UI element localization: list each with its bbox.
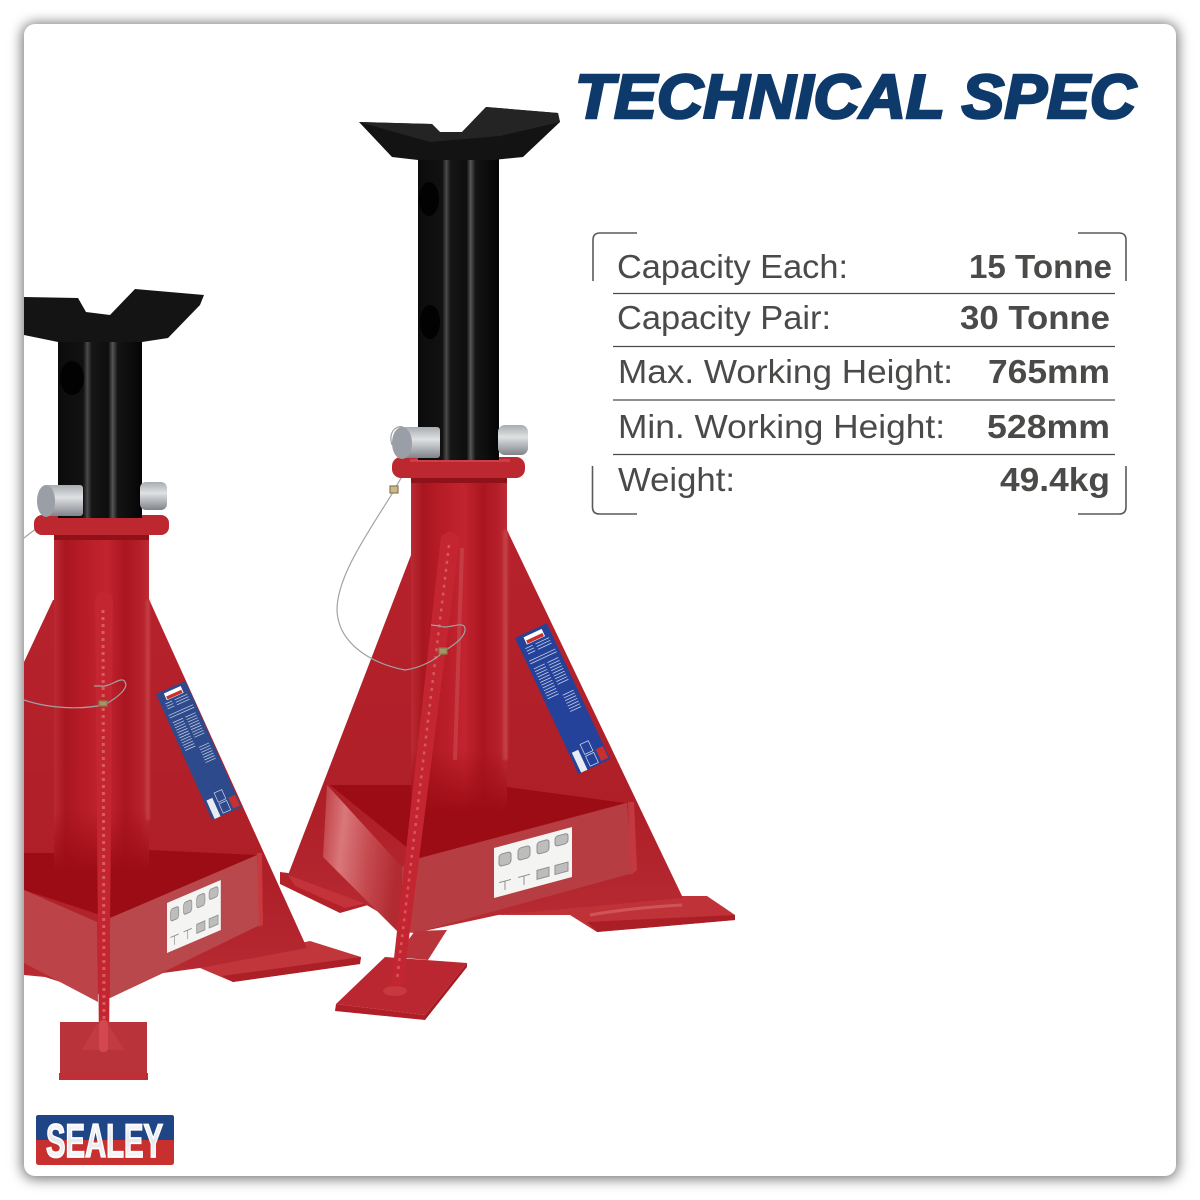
right stand: tray right panel [402, 803, 633, 933]
corner brackets [592, 233, 1126, 514]
right stand: rear-right foot [498, 896, 735, 932]
row: capacity pair: 30 Tonne [960, 299, 1110, 336]
right stand: triangular gusset [288, 530, 683, 933]
right stand: front foot plate [335, 957, 467, 1020]
row: weight: 49.4kg [1000, 461, 1110, 498]
row: max working height [618, 353, 1110, 390]
right stand: saddle [359, 107, 560, 160]
right stand: instruction sticker [494, 827, 572, 898]
right stand: locking pins [392, 425, 528, 459]
divider 2 [613, 346, 1115, 348]
row: max working height: 765mm [988, 353, 1110, 390]
divider 4 [613, 454, 1115, 456]
left stand: instruction sticker [167, 880, 221, 953]
right stand: prop rod [391, 531, 462, 985]
row: min working height: 528mm [987, 408, 1110, 445]
logo: Sealey: SEALEY [46, 1114, 163, 1167]
left stand: back-right foot [200, 941, 361, 982]
left stand: safety wire [24, 511, 126, 708]
left stand: front foot plate [59, 1020, 148, 1080]
specification table [592, 233, 1126, 514]
left stand: collar [34, 515, 169, 540]
left stand: locking pins [37, 482, 167, 517]
right stand: rear-left foot [280, 872, 368, 913]
jack stand: right [280, 107, 735, 1020]
left stand: weld at tray corner [257, 853, 263, 927]
row: capacity each [617, 248, 1112, 285]
left stand: red column [54, 530, 150, 872]
right stand: safety wire [337, 427, 465, 670]
row: weight: Weight: [618, 461, 735, 498]
left stand: triangular gusset [24, 597, 307, 998]
right stand: leg below tray [395, 930, 447, 960]
right stand: tray floor [330, 785, 625, 858]
right stand: black column [418, 155, 499, 460]
left stand: prop rod [97, 598, 113, 1022]
row: max working height: Max. Working Height: [618, 353, 953, 390]
logo: Sealey [36, 1114, 174, 1167]
left stand: tray floor [24, 850, 257, 918]
row: capacity pair [617, 299, 1110, 336]
right stand: tray left panel [323, 785, 402, 932]
left stand: saddle [24, 289, 204, 342]
divider 3 [613, 399, 1115, 401]
divider 1 [613, 292, 1115, 294]
left stand: warning label [156, 681, 242, 820]
row: min working height: Min. Working Height: [618, 408, 945, 445]
row: capacity pair: Capacity Pair: [617, 299, 831, 336]
row: weight [618, 461, 1110, 498]
jack stand: left (cropped by card edge) [24, 289, 361, 1080]
title: TECHNICAL SPEC [575, 63, 1137, 132]
right stand: collar [392, 457, 525, 483]
right stand: weld at tray corner [628, 802, 637, 875]
left stand: black column [58, 336, 142, 518]
row: min working height [618, 408, 1110, 445]
row: capacity each: Capacity Each: [617, 248, 848, 285]
left stand: tray right panel [110, 855, 260, 998]
right stand: warning label [515, 623, 610, 774]
row: capacity each: 15 Tonne [969, 248, 1112, 285]
left stand: tray left panel [24, 890, 98, 1002]
right stand: red column [411, 475, 508, 812]
